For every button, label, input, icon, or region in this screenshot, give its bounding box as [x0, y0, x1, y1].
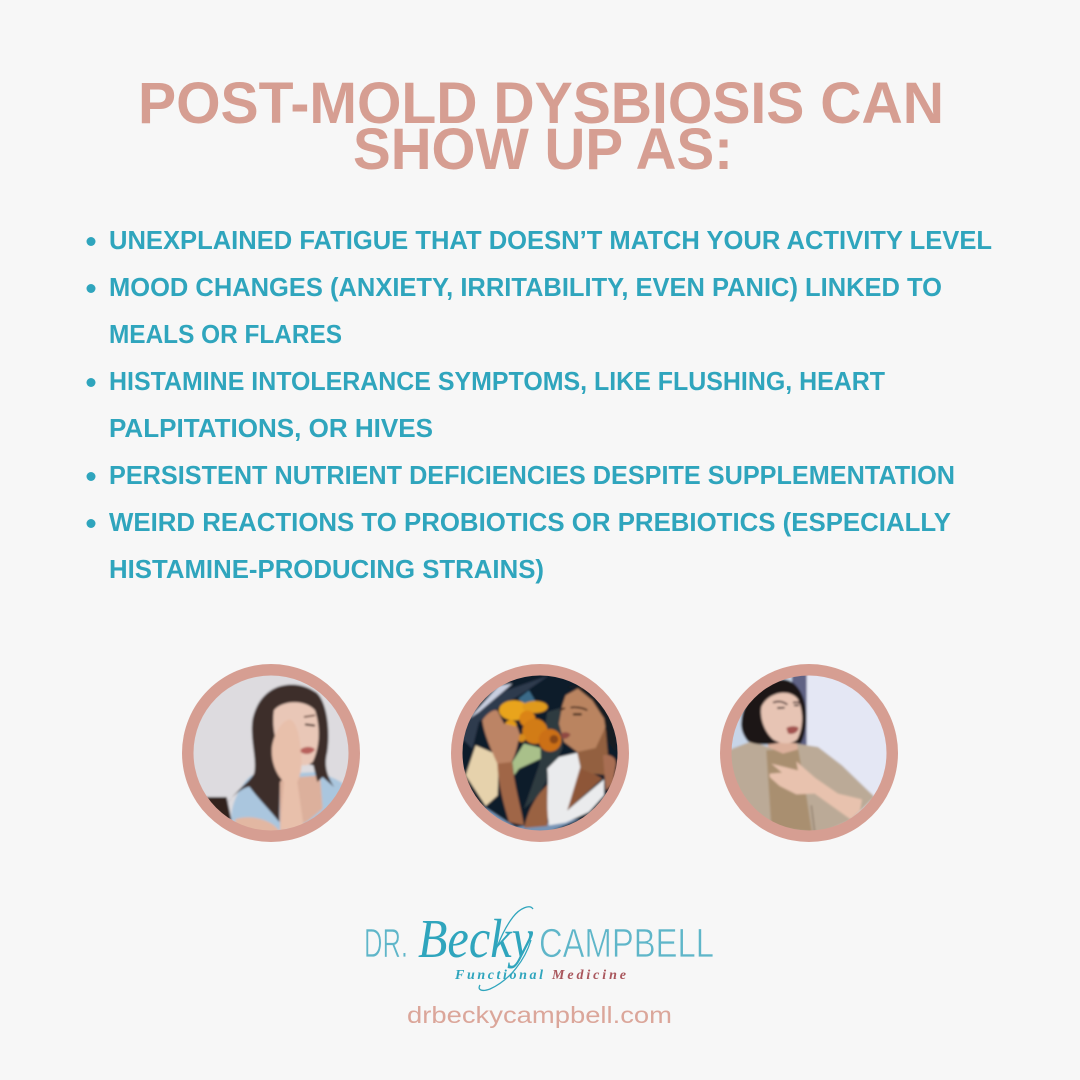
photo: woman with hand on her chest — [720, 664, 898, 842]
bullet: mood changes — [86, 272, 942, 349]
bullet: fatigue: UNEXPLAINED FATIGUE THAT DOESN’T MATCH YOUR ACTIVITY LEVEL — [109, 225, 992, 255]
logo: Dr. Becky Campbell Functional Medicine: CAMPBELL — [539, 920, 714, 966]
bullet: histamine intolerance: PALPITATIONS, OR HIVES — [109, 413, 433, 443]
bullet: nutrient deficiencies: PERSISTENT NUTRIENT DEFICIENCIES DESPITE SUPPLEMENTATION — [109, 460, 955, 490]
logo: Dr. Becky Campbell Functional Medicine — [364, 907, 714, 990]
bullet: probiotic reactions: WEIRD REACTIONS TO PROBIOTICS OR PREBIOTICS (ESPECIALLY — [109, 507, 951, 537]
title: POST-MOLD DYSBIOSIS CAN — [138, 71, 944, 136]
title — [138, 71, 944, 182]
title: SHOW UP AS: — [353, 117, 733, 182]
bullet: probiotic reactions: HISTAMINE-PRODUCING STRAINS) — [109, 554, 544, 584]
bullet: histamine intolerance — [86, 366, 885, 443]
logo: Dr. Becky Campbell Functional Medicine: DR. — [364, 920, 408, 966]
photo: woman gesturing in a car — [451, 664, 629, 842]
bullet: mood changes: MOOD CHANGES (ANXIETY, IRRITABILITY, EVEN PANIC) LINKED TO — [109, 272, 942, 302]
logo flourish — [479, 907, 533, 990]
bullet: probiotic reactions — [86, 507, 951, 584]
bullet: mood changes: MEALS OR FLARES — [109, 319, 342, 349]
photo: woman holding her forehead — [182, 664, 360, 842]
symptom bullet list — [86, 225, 992, 584]
website url: drbeckycampbell.com — [407, 1002, 672, 1028]
logo: Dr. Becky Campbell Functional Medicine: Functional — [454, 968, 543, 983]
bullet: histamine intolerance: HISTAMINE INTOLERANCE SYMPTOMS, LIKE FLUSHING, HEART — [109, 366, 885, 396]
logo: Dr. Becky Campbell Functional Medicine: Medicine — [551, 968, 626, 983]
logo: Dr. Becky Campbell Functional Medicine: Becky — [418, 908, 534, 969]
